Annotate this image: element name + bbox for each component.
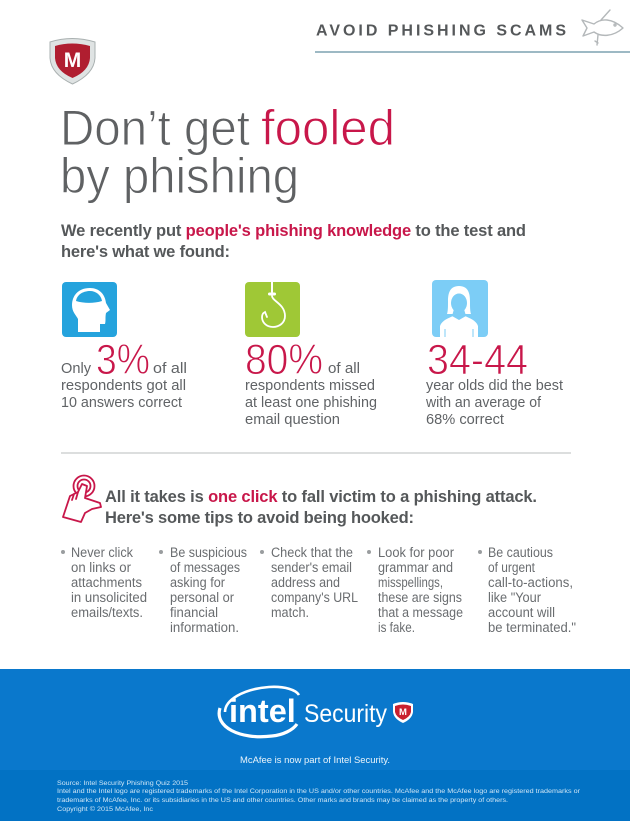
logo: McAfee shield — [50, 38, 95, 84]
fine print: Source: Intel Security Phishing Quiz 2015 — [57, 780, 188, 787]
tip 5: call-to-actions, — [488, 575, 573, 590]
icon: person — [432, 280, 488, 337]
tip 4: that a message — [378, 605, 463, 620]
logo: McAfee shield: M — [64, 49, 81, 72]
intro text — [61, 222, 526, 261]
tip 5: account will — [488, 605, 555, 620]
stat text: respondents got all — [61, 378, 186, 394]
fine print: Intel and the Intel logo are registered trademarks of the Intel Corporation in the US and/or other countries. McAfee and the McAfee logo are registered trademarks or — [57, 788, 581, 795]
stat text: respondents missed — [245, 378, 375, 394]
tip 4 — [367, 545, 463, 635]
tip 2: financial — [170, 605, 218, 620]
stat text — [425, 336, 563, 428]
icon: hand clicking — [63, 476, 101, 522]
panel: 80% stat — [245, 281, 377, 428]
tip 2: personal or — [170, 590, 234, 605]
title — [60, 100, 395, 204]
tip 5: like "Your — [488, 590, 541, 605]
tip 2: Be suspicious — [170, 545, 247, 560]
stat text: Only — [61, 361, 92, 377]
tip 1: attachments — [71, 575, 142, 590]
stat text: of all — [328, 361, 360, 377]
header: avoid phishing scams: AVOID PHISHING SCAMS — [316, 22, 566, 40]
title: fooled — [261, 100, 395, 156]
logo: Intel Security: Security — [304, 700, 387, 728]
stat text: year olds did the best — [426, 378, 563, 394]
title: Don’t get — [60, 100, 250, 156]
logo: Intel Security — [219, 687, 413, 737]
tip 3: address and — [271, 575, 340, 590]
tip 2 — [159, 545, 247, 635]
stat text: 80% — [245, 336, 323, 384]
icon: hook — [245, 281, 300, 337]
stat text: 34-44 — [427, 336, 528, 384]
callout heading: All it takes is one click to fall victim to a phishing attack. — [105, 488, 537, 506]
tip 2: information. — [170, 620, 239, 635]
stat text: of all — [153, 361, 187, 377]
footer panel — [0, 669, 630, 821]
fine print: trademarks of McAfee, Inc. or its subsidiaries in the US and other countries. Other marks and brands may be claimed as the property of others. — [57, 797, 508, 804]
tip 4: grammar and — [378, 560, 453, 575]
tip 1: in unsolicited — [71, 590, 147, 605]
panel: 3% stat — [61, 282, 187, 411]
tip 3: company's URL — [271, 590, 358, 605]
stat text — [61, 336, 187, 411]
stat text: email question — [245, 412, 340, 428]
tagline: McAfee is now part of Intel Security. — [240, 755, 390, 766]
tip 4: is fake. — [378, 620, 415, 635]
stat text: with an average of — [425, 395, 542, 411]
panel: 34-44 stat — [425, 280, 563, 428]
callout heading: Here's some tips to avoid being hooked: — [105, 509, 414, 527]
icon: fish on hook — [582, 10, 623, 45]
intro text: We recently put people's phishing knowledge to the test and — [61, 222, 526, 240]
stat text — [245, 336, 377, 428]
tip 1: emails/texts. — [71, 605, 143, 620]
tip 4: these are signs — [378, 590, 462, 605]
logo: Intel Security: intel — [229, 693, 296, 729]
tip 4: Look for poor — [378, 545, 454, 560]
tip 3: sender's email — [271, 560, 352, 575]
fine print: Copyright © 2015 McAfee, Inc — [57, 805, 154, 813]
stat text: at least one phishing — [245, 395, 377, 411]
tip 1: on links or — [71, 560, 131, 575]
header: avoid phishing scams — [315, 10, 630, 53]
tip 5 — [478, 545, 576, 635]
icon: head — [62, 282, 117, 337]
intro text: here's what we found: — [61, 243, 230, 261]
tip 1 — [61, 545, 147, 620]
callout heading — [105, 488, 537, 527]
stat text: 10 answers correct — [61, 395, 182, 411]
stat text: 3% — [96, 336, 150, 384]
tip 3 — [260, 545, 358, 620]
fine print — [57, 780, 581, 813]
tip 3: Check that the — [271, 545, 353, 560]
tip 1: Never click — [71, 545, 133, 560]
tip 5: of urgent — [488, 560, 535, 575]
tip 2: of messages — [170, 560, 240, 575]
stat text: 68% correct — [426, 412, 504, 428]
logo: Intel Security: M — [399, 707, 407, 718]
tip 3: match. — [271, 605, 309, 620]
tip 5: be terminated." — [488, 620, 576, 635]
title: by phishing — [60, 148, 299, 204]
tip 4: misspellings, — [378, 575, 443, 590]
tip 5: Be cautious — [488, 545, 553, 560]
tip 2: asking for — [170, 575, 225, 590]
